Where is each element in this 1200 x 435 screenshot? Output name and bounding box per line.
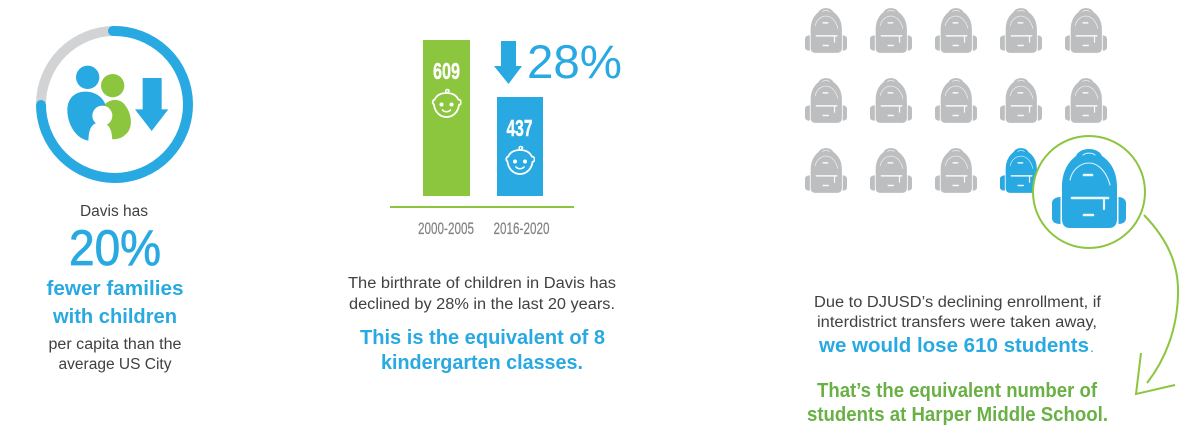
text: per capita <box>48 336 182 373</box>
text: enrollment description <box>814 294 1102 331</box>
text: Harper Middle School callout: That’s the equivalent number of <box>817 380 1097 402</box>
text: fewer families with children <box>46 277 184 328</box>
bar: 2016-2020: 437 <box>506 115 532 141</box>
text: Davis has: Davis has <box>80 203 148 220</box>
text: birthrate description: The birthrate of children in Davis has <box>348 275 616 292</box>
bar: 2000-2005 <box>423 40 470 196</box>
bar chart <box>390 40 574 238</box>
text: birthrate description: declined by 28% in the last 20 years. <box>349 296 615 313</box>
progress ring <box>41 31 188 178</box>
text: we would lose 610 students: we would lose 610 students <box>818 334 1089 357</box>
text: kindergarten callout: kindergarten classes. <box>381 351 583 374</box>
text: per capita: per capita than the <box>48 336 182 353</box>
axis labels <box>418 220 550 238</box>
icon: circled large backpack <box>1033 136 1145 248</box>
text: we would lose 610 students: . <box>1090 339 1094 355</box>
icon: family with down arrow <box>67 66 168 143</box>
text: birthrate description <box>348 275 616 313</box>
icon grid: gray backpacks <box>805 8 1107 193</box>
bar: 2000-2005: 609 <box>433 58 460 84</box>
text: kindergarten callout: This is the equivalent of 8 <box>360 326 605 349</box>
text: enrollment description: interdistrict transfers were taken away, <box>817 314 1097 331</box>
panel: birthrate chart <box>348 35 622 374</box>
text: Harper Middle School callout <box>807 380 1108 426</box>
axis labels: 2000-2005 <box>418 220 474 238</box>
stat: 20%: 20% <box>69 220 161 276</box>
arrow: curved green <box>1136 215 1178 394</box>
panel: families statistic <box>41 31 188 373</box>
text: kindergarten callout <box>360 326 605 374</box>
icon: small blue backpack <box>1000 148 1042 193</box>
bar: 2016-2020 <box>497 97 543 196</box>
panel: backpacks <box>805 8 1178 426</box>
text: fewer families with children: fewer families <box>46 277 184 300</box>
text: Harper Middle School callout: students at Harper Middle School. <box>807 404 1108 426</box>
arrow: decline <box>494 41 522 84</box>
text: fewer families with children: with children <box>52 305 177 328</box>
text: enrollment description: Due to DJUSD’s declining enrollment, if <box>814 294 1102 311</box>
axis labels: 2016-2020 <box>494 220 550 238</box>
text: per capita: average US City <box>58 356 172 373</box>
stat: 28%: 28% <box>527 35 622 88</box>
